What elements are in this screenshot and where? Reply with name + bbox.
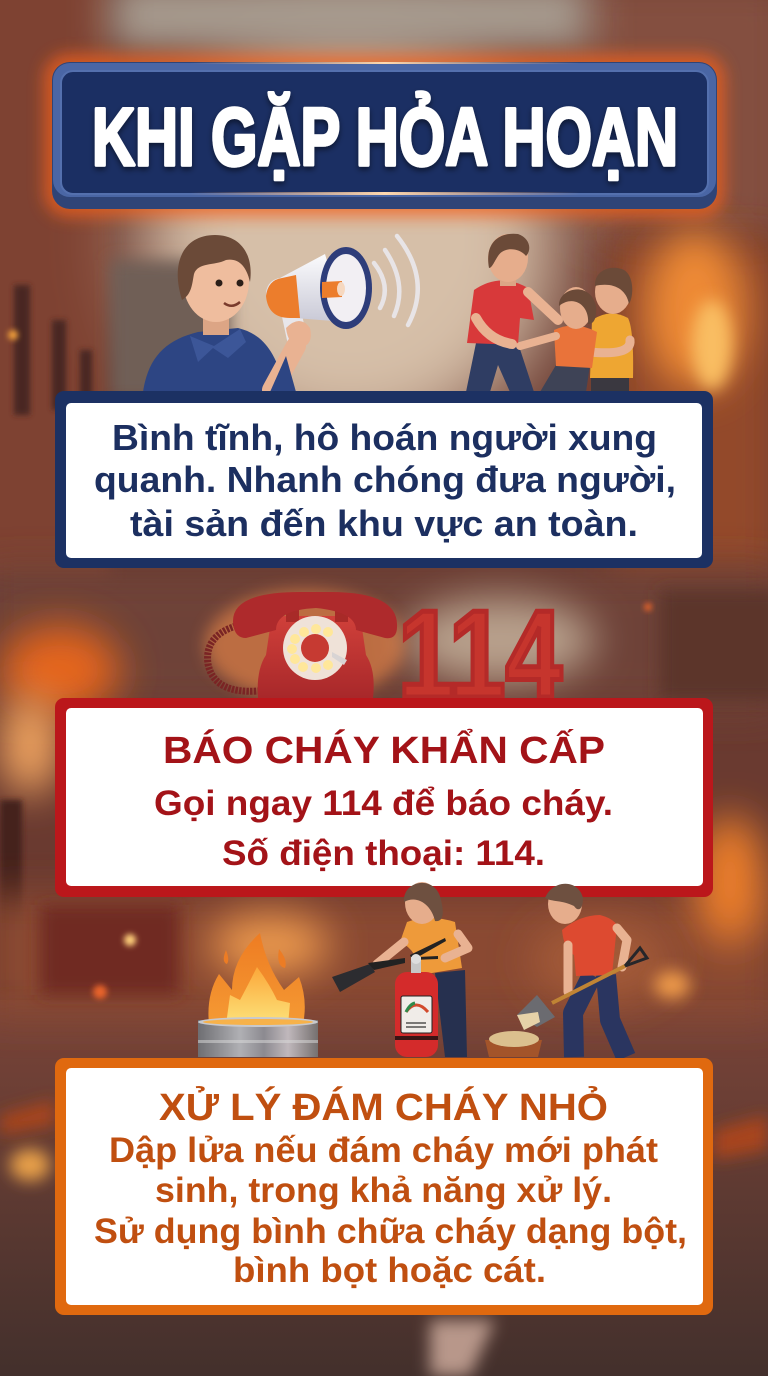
panel text [94, 1085, 687, 1290]
panel: calm and alert [55, 391, 713, 568]
illustration: woman with fire extinguisher [332, 882, 468, 1057]
panel text: tài sản đến khu vực an toàn. [130, 503, 638, 544]
panel text [94, 417, 676, 544]
panel text: Dập lửa nếu đám cháy mới phát [109, 1131, 658, 1170]
man in red [466, 234, 558, 392]
illustration: red rotary telephone [205, 590, 405, 700]
panel text: Sử dụng bình chữa cháy dạng bột, [94, 1212, 687, 1251]
panel text: XỬ LÝ ĐÁM CHÁY NHỎ [159, 1085, 608, 1129]
megaphone [266, 236, 418, 392]
panel text [154, 727, 613, 873]
big number 114: 114 [398, 586, 562, 724]
sound waves [374, 236, 418, 325]
title banner [44, 54, 725, 217]
panel: small fire handling [55, 1058, 713, 1315]
panel text: bình bọt hoặc cát. [233, 1251, 546, 1290]
panel text: sinh, trong khả năng xử lý. [155, 1171, 612, 1210]
panel text: Gọi ngay 114 để báo cháy. [154, 784, 613, 823]
illustration: man with megaphone [143, 235, 418, 392]
man in yellow [590, 268, 633, 391]
illustration: burning drum [198, 933, 318, 1057]
illustration: people helping each other to safety [466, 234, 633, 392]
girl in orange [520, 287, 597, 392]
illustration: man shoveling sand [485, 884, 647, 1057]
panel text: Bình tĩnh, hô hoán người xung [112, 417, 657, 458]
panel text: quanh. Nhanh chóng đưa người, [94, 459, 676, 500]
panel text: BÁO CHÁY KHẨN CẤP [163, 727, 605, 772]
panel: emergency call [55, 698, 713, 897]
panel text: Số điện thoại: 114. [222, 834, 545, 873]
